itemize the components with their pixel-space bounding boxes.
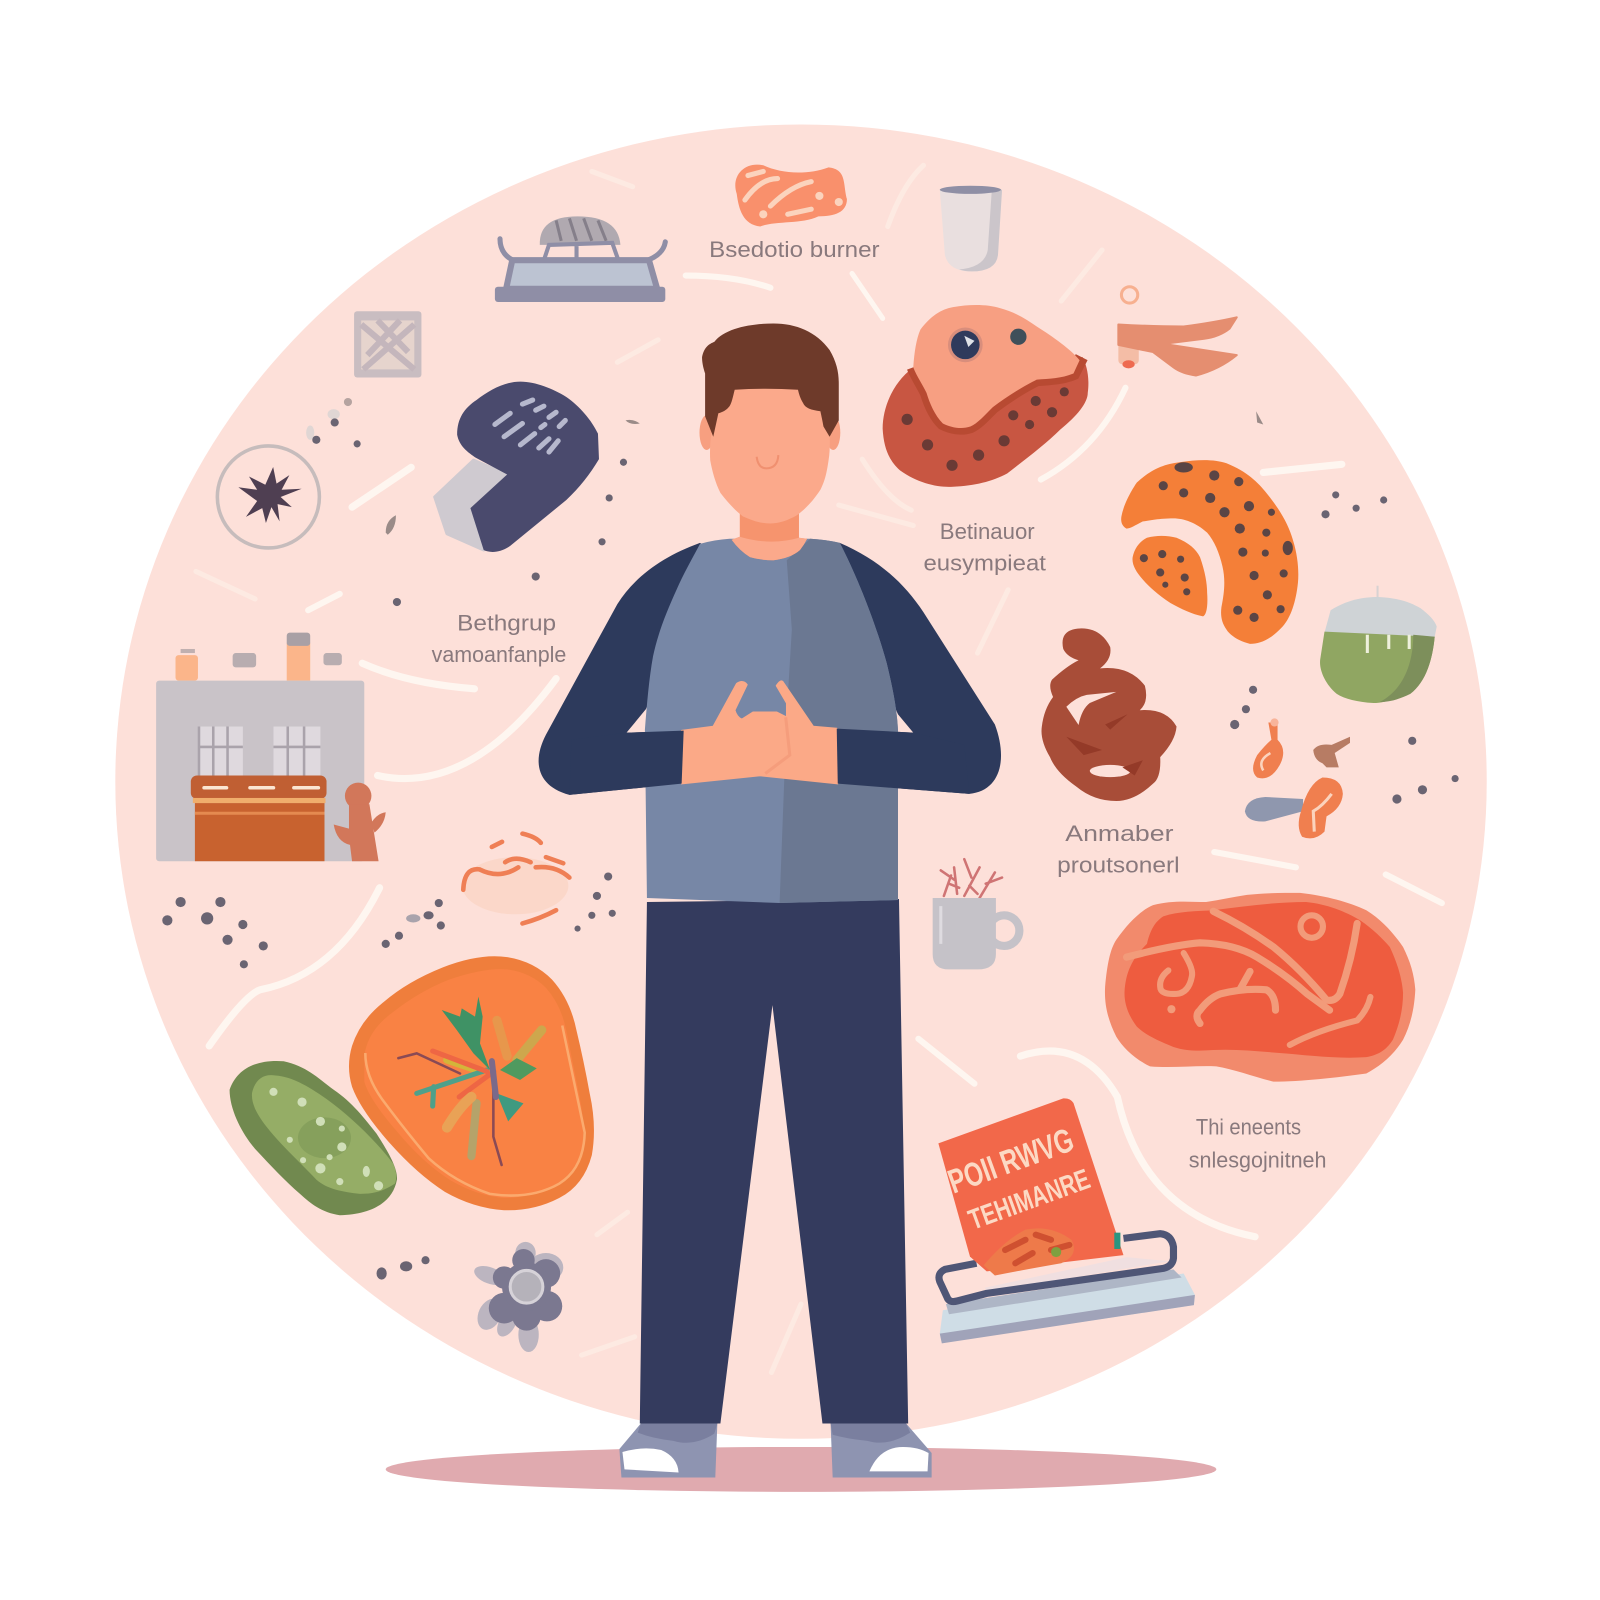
book title: POII RWVG xyxy=(943,1122,1079,1201)
nose xyxy=(757,455,778,468)
icon: brown coil xyxy=(1041,628,1177,801)
label: right middle b: proutsonerl xyxy=(1057,852,1180,877)
shirt shaded side xyxy=(780,539,898,903)
forearm left xyxy=(569,731,684,795)
label: lower right a: Thi eneents xyxy=(1196,1115,1301,1140)
icon: steak xyxy=(1105,893,1415,1082)
panel: circle background xyxy=(115,124,1487,1439)
icon: coloured tree xyxy=(398,997,542,1165)
face xyxy=(710,378,830,523)
icon: lattice square xyxy=(354,311,421,378)
shoes xyxy=(619,1423,932,1478)
icon: recipe book on tray xyxy=(938,1098,1195,1343)
icon: small organ cluster xyxy=(1245,718,1350,838)
icon: cup with plant xyxy=(933,859,1019,969)
label: lower right b: snlesgojnitneh xyxy=(1189,1147,1327,1172)
scattered dots xyxy=(162,398,1459,1280)
icon: liver with spots xyxy=(883,305,1088,487)
book title xyxy=(943,1121,1094,1239)
label: left lower: vamoanfanple xyxy=(432,642,566,667)
ground shadow xyxy=(386,1447,1216,1492)
label: right upper b: eusympieat xyxy=(923,550,1047,575)
trousers xyxy=(640,899,908,1423)
icon: pastry xyxy=(462,834,569,923)
shirt xyxy=(645,539,898,903)
icon: star compass xyxy=(217,446,319,548)
icon: spotted orange croissant xyxy=(1121,460,1298,644)
hands xyxy=(682,681,838,784)
neck and collar xyxy=(732,505,807,560)
right sleeve xyxy=(827,543,1001,794)
icon: orange patterned shape xyxy=(349,956,594,1210)
forearm right xyxy=(837,729,969,794)
icon: dark block xyxy=(435,382,599,552)
label: left upper: Bethgrup xyxy=(457,611,556,636)
icon: glass cup xyxy=(940,186,1002,271)
icon: green pickle xyxy=(230,1061,397,1215)
decorative flowing lines xyxy=(196,165,1442,1372)
label: right middle a: Anmaber xyxy=(1065,821,1174,846)
icon: small figure xyxy=(334,783,386,861)
hair xyxy=(702,323,839,437)
icon: hand pieces top right xyxy=(1118,287,1237,376)
label: right upper a: Betinauor xyxy=(940,519,1035,544)
ears xyxy=(699,415,840,450)
icon: grey flower xyxy=(472,1242,563,1352)
book title: TEHIMANRE xyxy=(964,1163,1094,1237)
left sleeve xyxy=(539,543,714,795)
person xyxy=(539,323,1001,1478)
icon: top orange blob xyxy=(735,165,847,227)
icon: green pot xyxy=(1320,586,1437,703)
icon: factory building xyxy=(156,633,364,861)
icon: grill tray xyxy=(495,216,665,302)
label: top centre: Bsedotio burner xyxy=(709,237,880,262)
